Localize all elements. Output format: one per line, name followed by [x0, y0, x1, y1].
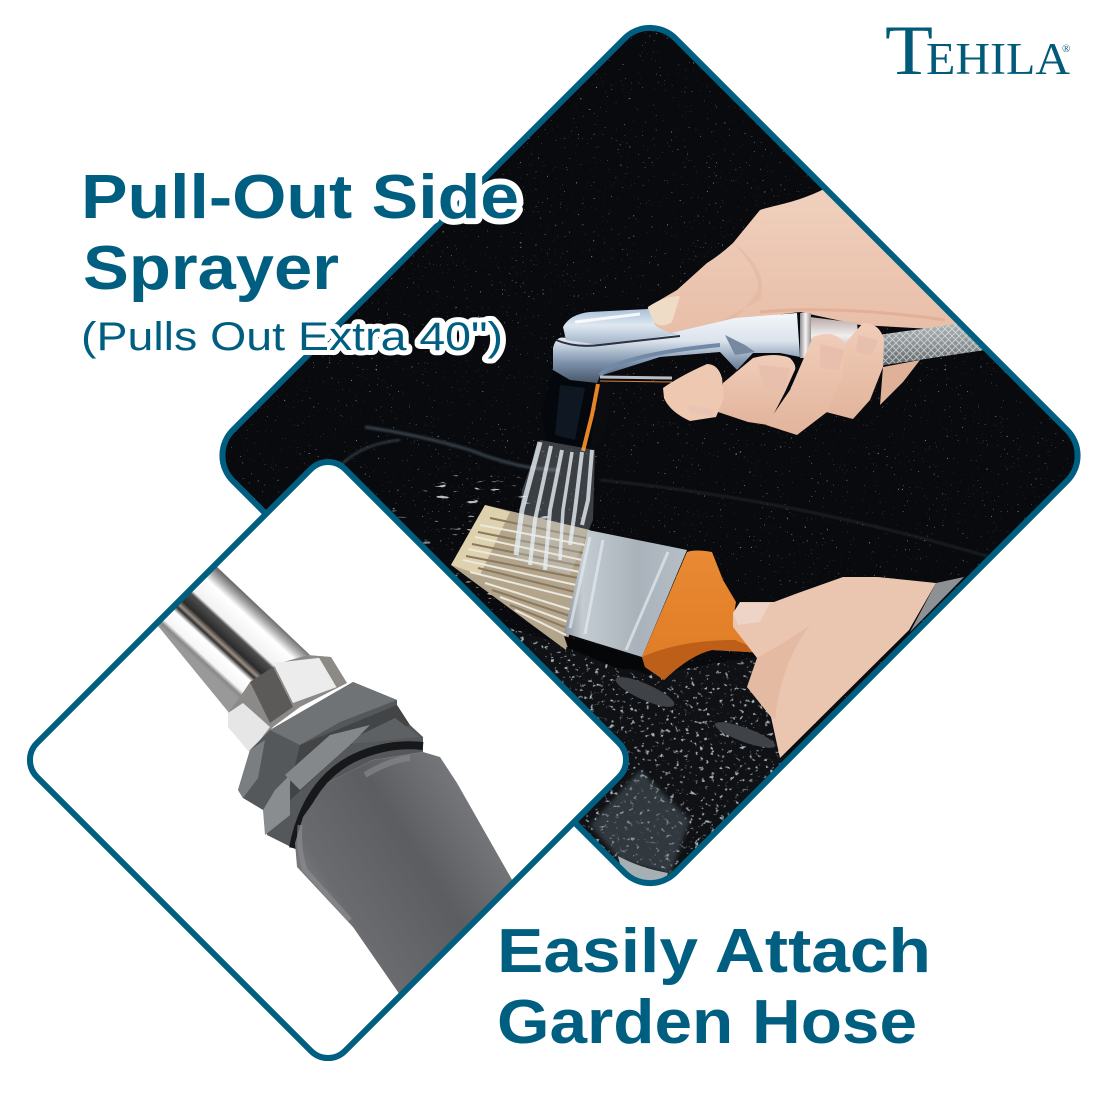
- icon: chrome spout pipe: [158, 565, 310, 720]
- heading: pull-out side sprayer: Pull-Out Side: [81, 163, 519, 232]
- icon: braided hose: [882, 324, 983, 366]
- heading: easily attach garden hose: Garden Hose: [497, 988, 917, 1057]
- icon: paint brush ferrule and handle: [564, 530, 766, 680]
- subheading: pulls out extra 40 inches: (Pulls Out Extra 40"): [81, 315, 503, 359]
- icon: hand gripping sprayer, palm: [648, 190, 957, 333]
- icon: sprayer dark nozzle: [541, 370, 612, 452]
- floor lower bluish sheen: [590, 770, 690, 875]
- brand logo: [885, 12, 1071, 90]
- heading: pull-out side sprayer: [81, 163, 519, 303]
- icon: fingers around sprayer: [663, 323, 920, 435]
- icon: hand holding brush: [733, 577, 964, 758]
- icon: chrome adapter nut: [228, 655, 347, 753]
- icon: paint brush bristles: [451, 505, 590, 650]
- floor ripple highlights: [509, 628, 782, 874]
- wet droplets left of brush: [392, 475, 550, 610]
- pale sink rim at bottom tip: [618, 856, 668, 880]
- icon: grey hose body: [295, 752, 515, 995]
- heading: pull-out side sprayer: Sprayer: [83, 234, 339, 303]
- wet textured sink floor: [512, 630, 786, 870]
- panel: garden hose connection diamond: [30, 462, 626, 1058]
- brand logo: ®: [1062, 43, 1070, 55]
- panel: sprayer photo diamond: [210, 10, 1100, 900]
- brand logo: T: [885, 12, 933, 90]
- icon: gunmetal hex ring: [238, 682, 423, 850]
- heading: easily attach garden hose: [497, 917, 931, 1057]
- puddles on floor: [616, 677, 776, 748]
- brand logo: EHILA: [926, 34, 1071, 84]
- heading: easily attach garden hose: Easily Attach: [497, 917, 931, 986]
- faint sink basin edges: [330, 427, 1000, 560]
- water stream: [516, 440, 595, 575]
- icon: sprayer chrome body: [553, 309, 860, 383]
- speckled sink surface: [226, 31, 1074, 750]
